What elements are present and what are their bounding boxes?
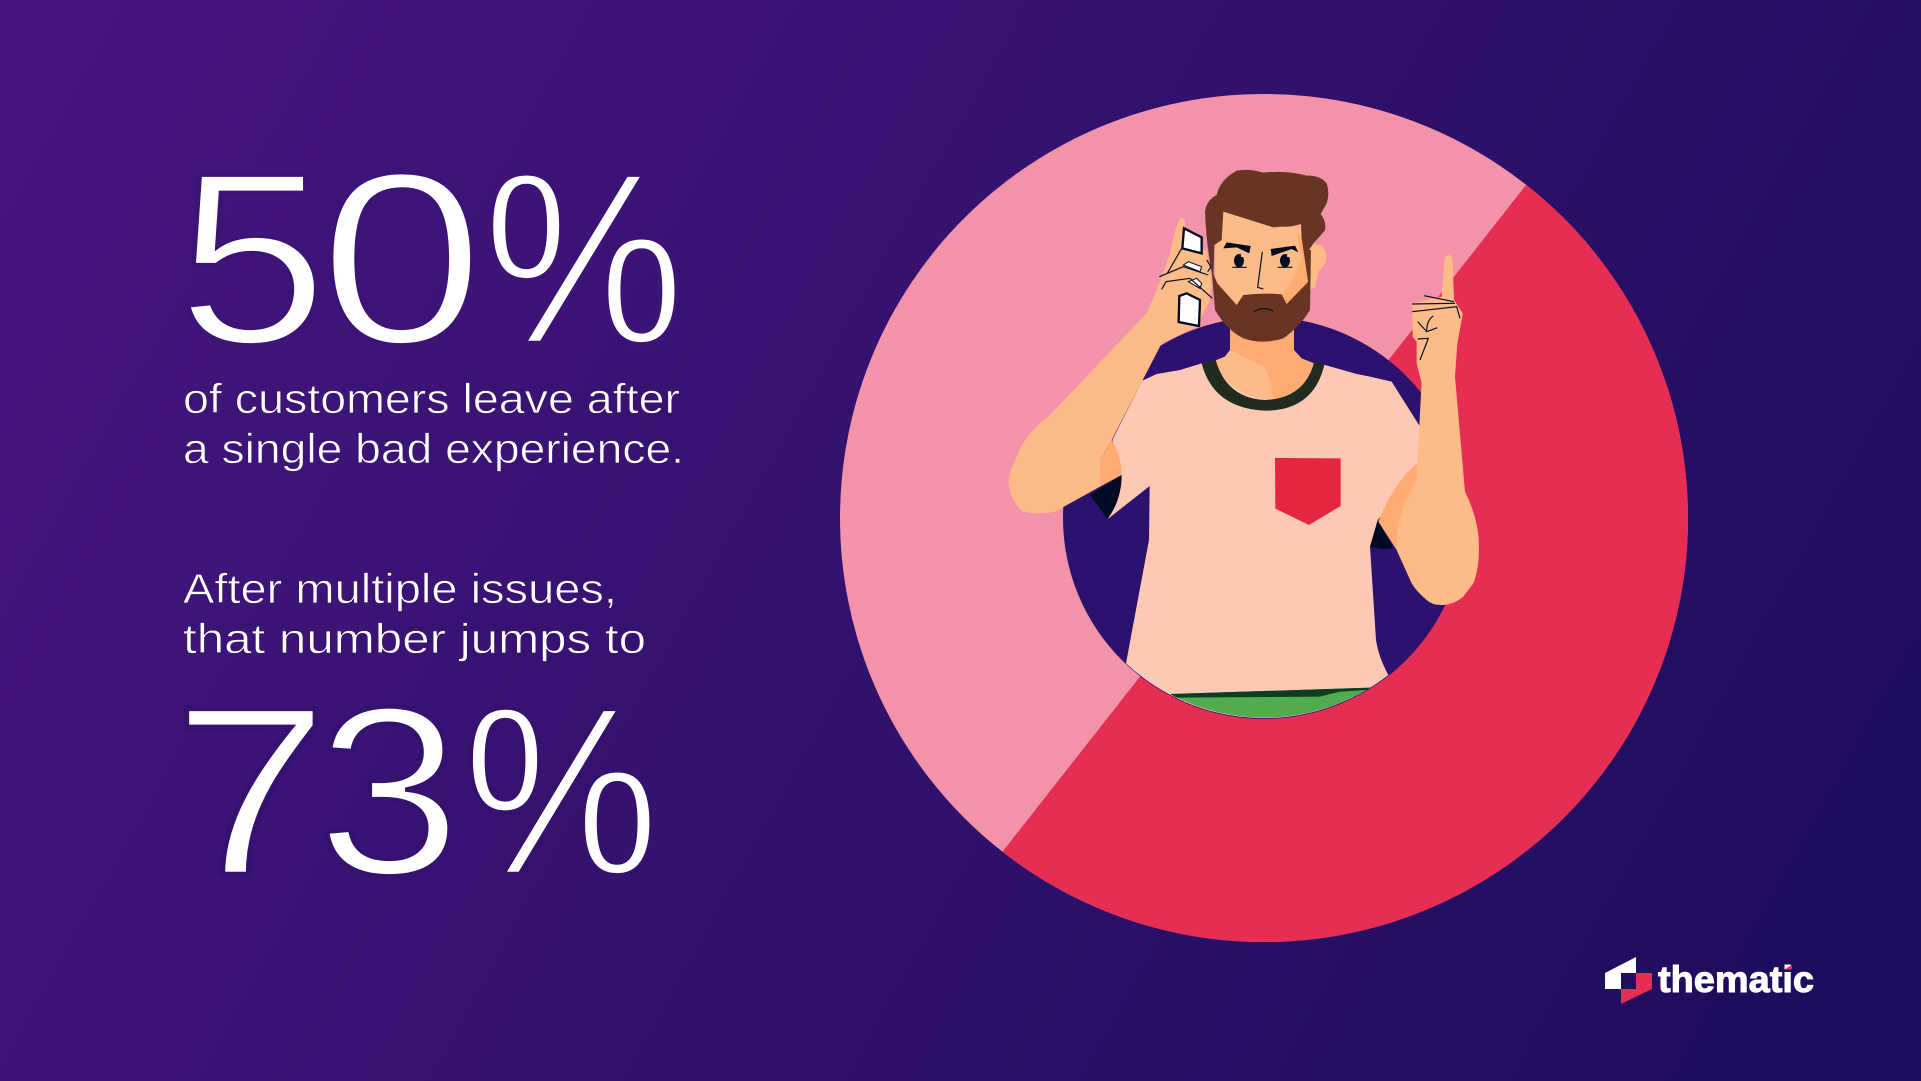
collar [1202, 360, 1324, 411]
text: multiple issues: that number jumps to [183, 615, 646, 662]
statistic: 73% [172, 656, 659, 925]
statistic: 73%: 7 [172, 656, 330, 925]
statistic: 73%: % [463, 656, 659, 925]
t-shirt [1107, 363, 1420, 718]
right arm [1397, 255, 1479, 605]
statistic: 50% [177, 121, 685, 396]
face shade [1282, 233, 1310, 304]
right hand finger lines [1412, 296, 1460, 360]
text: single bad experience [183, 375, 684, 472]
logo: thematic [1605, 957, 1814, 1004]
left hand finger lines [1159, 248, 1212, 298]
segment: red half [1003, 185, 1700, 960]
hair [1205, 170, 1328, 283]
chest highlight [1215, 350, 1273, 399]
text: single bad experience: of customers leave after [183, 375, 680, 422]
text: multiple issues: After multiple issues, [183, 565, 617, 612]
beard [1212, 250, 1311, 342]
eyebrows [1223, 242, 1298, 256]
segment: pink half [840, 94, 1688, 942]
illustration: man on phone [1008, 170, 1479, 718]
sleeve shade [1100, 440, 1122, 487]
face lines [1232, 252, 1292, 312]
phone [1179, 228, 1202, 326]
left arm [1008, 218, 1212, 513]
armpit shadows [1090, 475, 1393, 549]
right arm shade [1378, 463, 1420, 550]
statistic: 50%: 5 [177, 121, 328, 395]
text: single bad experience: a single bad experience. [183, 425, 684, 472]
statistic: 50%: % [483, 122, 685, 396]
statistic: 73%: 3 [317, 657, 461, 925]
face [1215, 210, 1308, 307]
logo mark white [1605, 957, 1636, 989]
shorts shadow [1170, 688, 1370, 698]
shorts [1170, 688, 1370, 718]
pocket [1275, 458, 1341, 525]
donut hole [1063, 317, 1465, 719]
neck [1215, 323, 1314, 399]
right ear [1308, 244, 1327, 290]
eyes [1234, 254, 1290, 267]
statistic: 50%: 0 [319, 121, 485, 395]
logo accent [1785, 965, 1792, 969]
donut chart [840, 94, 1700, 960]
logo mark red [1621, 973, 1652, 1004]
logo wordmark: thematic [1658, 959, 1814, 1000]
text: multiple issues [183, 565, 646, 662]
